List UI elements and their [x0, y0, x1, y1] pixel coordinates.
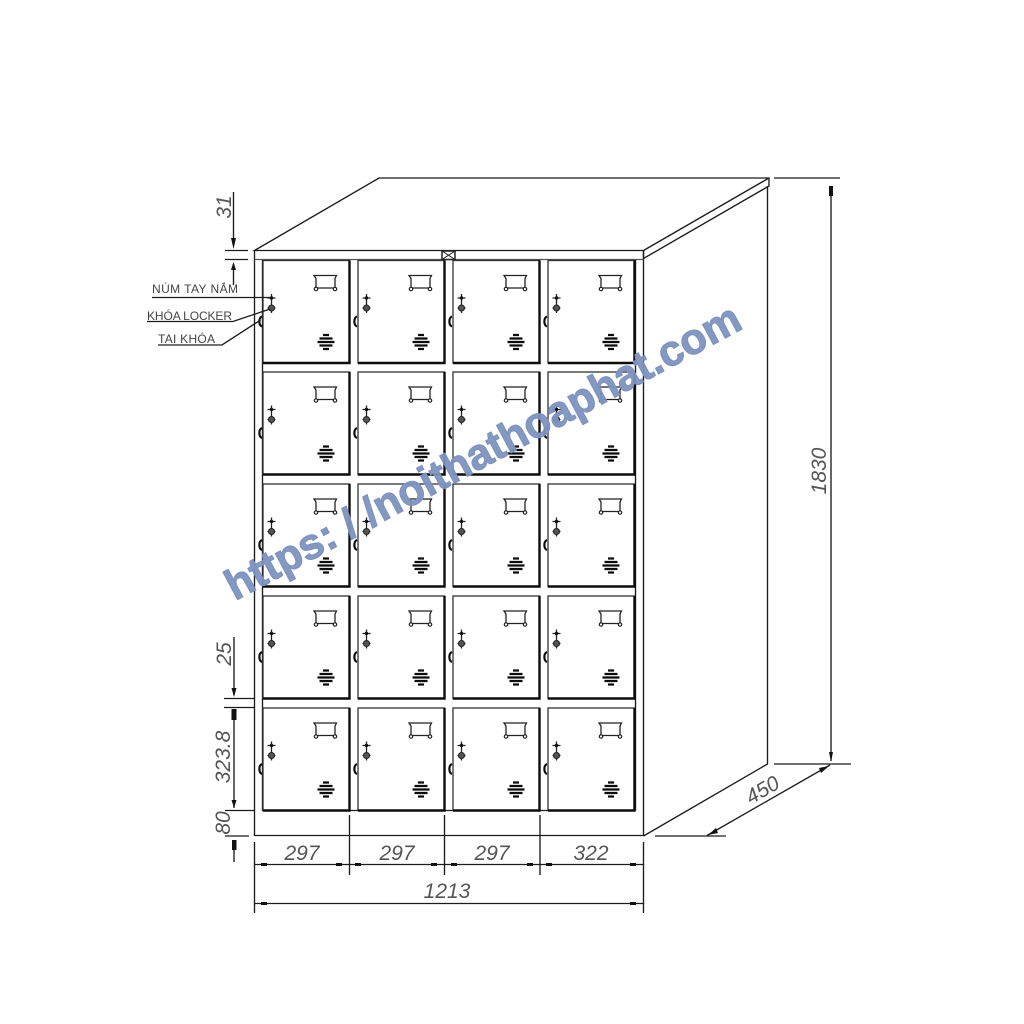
dimension: 31 — [213, 192, 248, 285]
door row 3 — [259, 484, 634, 586]
dimension: 25 — [213, 637, 254, 708]
door row 4 — [259, 596, 634, 698]
dimension: total width 1213: 1213 — [424, 880, 471, 903]
dimension: depth 450 — [655, 765, 830, 836]
dimensions: door widths: 322 — [573, 842, 609, 865]
dimension: depth 450: 450 — [742, 771, 784, 809]
cabinet body in perspective — [254, 178, 769, 836]
dimension: 80: 80 — [212, 811, 235, 835]
dimensions: door widths: 297 — [283, 842, 321, 865]
dimensions: door widths: 297 — [378, 842, 416, 865]
door row 1 — [259, 260, 634, 363]
dimension: height 1830: 1830 — [808, 447, 831, 494]
dimension: height 1830 — [774, 178, 851, 764]
door row 2 — [259, 372, 634, 474]
door row 5 — [259, 708, 634, 810]
dimension: 323.8: 323.8 — [212, 730, 235, 783]
dimension: 323.8 — [212, 709, 254, 836]
dimension: 25: 25 — [213, 642, 236, 667]
dimension: total width 1213 — [254, 880, 644, 905]
part labels with leader lines: NÚM TAY NẮM — [152, 281, 238, 296]
part labels with leader lines — [147, 281, 272, 346]
top lock symbol — [442, 251, 455, 260]
dimension: 31: 31 — [213, 195, 236, 219]
dimensions: door widths — [254, 815, 644, 913]
part labels with leader lines: TAI KHÓA — [158, 331, 215, 346]
watermark: https: / /noithathoaphat.com — [217, 294, 749, 610]
part labels with leader lines: KHÓA LOCKER — [147, 308, 232, 323]
dimensions: door widths: 297 — [473, 842, 511, 865]
dimension: 80 — [212, 811, 236, 862]
